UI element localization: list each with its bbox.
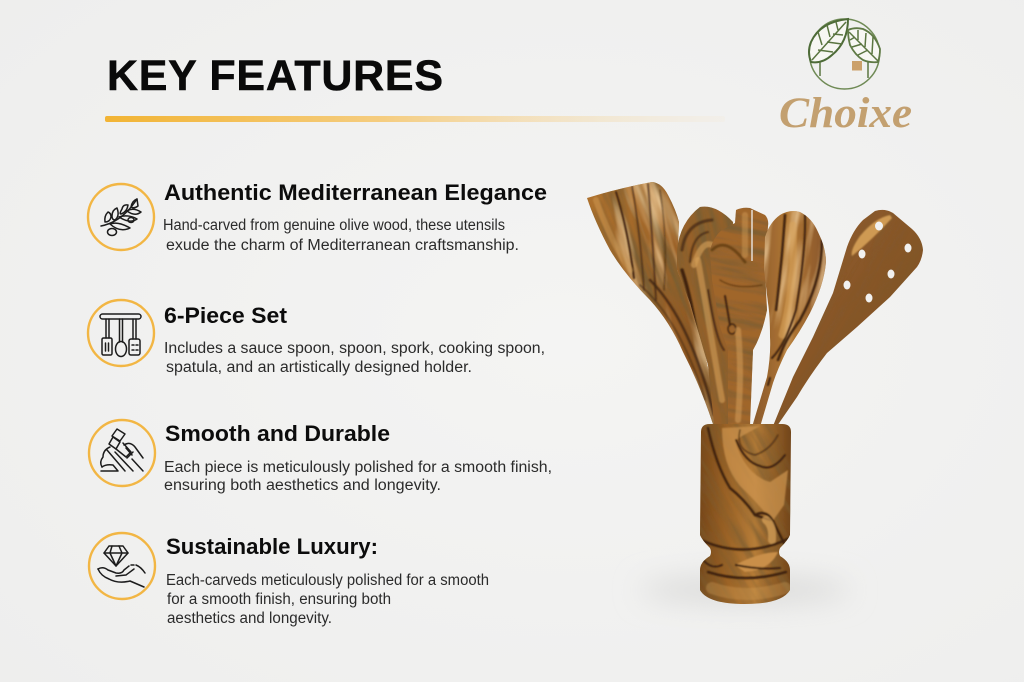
description: Hand-carved from genuine olive wood, these utensils (163, 217, 505, 234)
utensil: spoon (677, 206, 733, 424)
utensil holder (700, 424, 791, 604)
description (166, 572, 489, 627)
description: Each piece is meticulously polished for a smooth finish, (164, 459, 552, 476)
logo emblem (809, 19, 880, 89)
title underline (105, 116, 725, 122)
logo: Choixe (779, 19, 912, 137)
product photo: olive wood utensil set (587, 182, 923, 608)
description: Each-carveds meticulously polished for a smooth (166, 572, 489, 589)
description: spatula, and an artistically designed holder. (166, 359, 472, 376)
heading: 6-Piece Set (164, 303, 288, 328)
spork slit (751, 210, 753, 261)
feature 1: Mediterranean elegance (88, 180, 547, 254)
description (163, 217, 519, 254)
feature 4: sustainable luxury (89, 533, 489, 627)
title: KEY FEATURES (107, 52, 443, 100)
description (164, 459, 552, 494)
description: Includes a sauce spoon, spoon, spork, cooking spoon, (164, 340, 545, 357)
utensil: spork (710, 208, 768, 424)
heading: Smooth and Durable (165, 421, 390, 446)
utensil: left spatula (587, 182, 714, 424)
holder shadow (640, 577, 850, 603)
description: ensuring both aesthetics and longevity. (164, 477, 441, 494)
utensil: slotted spatula (774, 210, 923, 424)
description (164, 340, 545, 376)
feature 2: 6-piece set (88, 300, 545, 376)
icon: olive branch (88, 184, 154, 250)
icon: diamond in hand (89, 533, 155, 599)
feature 3: smooth and durable (89, 420, 552, 494)
utensil: wooden spoon (752, 211, 826, 424)
description: for a smooth finish, ensuring both (167, 591, 391, 608)
logo wordmark: Choixe (779, 90, 912, 137)
icon: hand polishing (89, 420, 155, 486)
description: aesthetics and longevity. (167, 610, 332, 627)
heading: Authentic Mediterranean Elegance (164, 180, 547, 205)
icon: hanging utensils (88, 300, 154, 366)
description: exude the charm of Mediterranean craftsmanship. (166, 237, 519, 254)
heading: Sustainable Luxury: (166, 534, 378, 559)
spatula holes (844, 222, 912, 302)
